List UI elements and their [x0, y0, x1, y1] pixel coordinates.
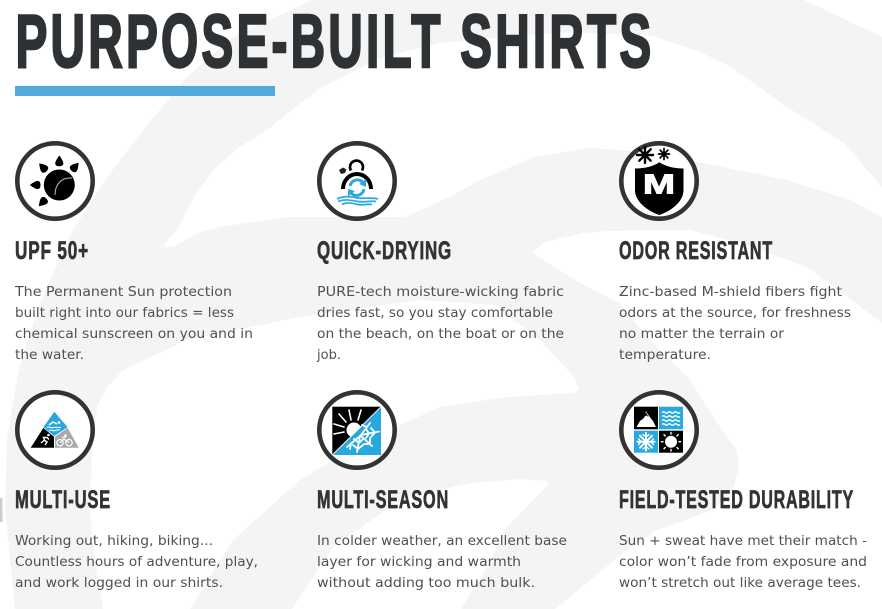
description — [14, 285, 253, 363]
description: layer for wicking and warmth — [317, 555, 521, 570]
description — [15, 534, 258, 591]
heading: ODOR RESISTANT — [619, 237, 773, 265]
description — [619, 285, 851, 363]
panel: Field-Tested Durability — [619, 392, 867, 591]
description — [317, 534, 567, 591]
icon: M shield with snowflakes — [621, 143, 697, 219]
description: chemical sunscreen on you and in — [15, 327, 253, 342]
heading: MULTI-SEASON — [317, 486, 449, 514]
panel: Odor Resistant — [619, 143, 851, 363]
description: The Permanent Sun protection — [14, 285, 232, 300]
description: without adding too much bulk. — [317, 576, 535, 591]
icon: triathlon triangle — [17, 392, 93, 468]
icon: sun and snowflake square — [319, 392, 395, 468]
description — [316, 285, 564, 363]
description: dries fast, so you stay comfortable — [317, 306, 553, 321]
panel: Multi-Use — [15, 392, 258, 591]
description: Working out, hiking, biking... — [15, 534, 213, 549]
panel: Multi-Season — [317, 392, 567, 591]
icon: stopwatch over water — [319, 143, 395, 219]
description: Zinc-based M-shield fibers fight — [619, 285, 842, 300]
description: odors at the source, for freshness — [619, 306, 851, 321]
description: In colder weather, an excellent base — [317, 534, 567, 549]
description — [619, 534, 867, 591]
description: built right into our fabrics = less — [15, 306, 234, 321]
description: Countless hours of adventure, play, — [15, 555, 258, 570]
heading: MULTI-USE — [15, 486, 111, 514]
icon: four elements grid — [621, 392, 697, 468]
heading: UPF 50+ — [15, 237, 89, 265]
description: and work logged in our shirts. — [15, 576, 223, 591]
heading: QUICK-DRYING — [317, 237, 452, 265]
panel: UPF 50+ — [14, 143, 253, 363]
description: job. — [316, 348, 341, 363]
title underline bar — [15, 86, 275, 96]
description: Sun + sweat have met their match - — [619, 534, 867, 549]
description: temperature. — [619, 348, 711, 363]
description: won’t stretch out like average tees. — [619, 576, 861, 591]
description: no matter the terrain or — [619, 327, 785, 342]
icon: sun — [17, 143, 93, 219]
description: PURE-tech moisture-wicking fabric — [317, 285, 564, 300]
description: color won’t fade from exposure and — [619, 555, 867, 570]
icon: M shield with snowflakes: M — [643, 168, 675, 199]
description: on the beach, on the boat or on the — [317, 327, 564, 342]
panel: Quick-Drying — [316, 143, 564, 363]
description: the water. — [15, 348, 84, 363]
